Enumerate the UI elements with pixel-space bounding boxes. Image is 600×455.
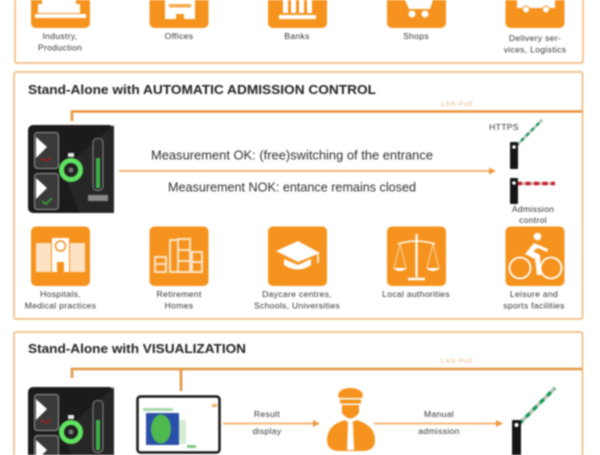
arrow (119, 168, 496, 174)
icon: offices (150, 0, 208, 28)
label: retirement: Retirement (156, 289, 202, 299)
icon: hospitals (31, 226, 90, 286)
panel: automatic admission control (14, 72, 582, 319)
heading: Stand-Alone with VISUALIZATION (28, 342, 246, 356)
label: shops: Shops (403, 31, 429, 41)
panel: top use cases (15, 0, 583, 63)
LAN label: LAN PoE (441, 101, 474, 108)
tablet (138, 396, 220, 452)
label: HTTPS: HTTPS (489, 122, 519, 132)
label: delivery: Delivery ser- (509, 33, 561, 43)
icon: retirement homes (150, 226, 208, 286)
label: offices: Offices (165, 31, 193, 41)
device: access terminal (28, 125, 114, 213)
arrow: result display (223, 420, 320, 427)
message: OK: Measurement OK: (free)switching of the entrance (151, 148, 433, 162)
label: delivery: vices, Logistics (504, 44, 566, 54)
label: education: Schools, Universities (254, 300, 340, 310)
label: result display: Result (254, 409, 280, 419)
panel: visualization (14, 332, 582, 455)
barrier open (510, 120, 542, 169)
arrow: manual admission (374, 420, 503, 427)
icon: industry (31, 0, 90, 28)
heading: Stand-Alone with AUTOMATIC ADMISSION CONTROL (28, 83, 376, 97)
label: manual admission: Manual (424, 409, 454, 419)
label: banks: Banks (284, 31, 310, 41)
label: industry: Production (38, 42, 82, 52)
LAN line (72, 112, 582, 121)
icon: guard (327, 388, 375, 451)
label: industry: Industry, (42, 31, 78, 41)
LAN label: LAN PoE (441, 358, 474, 365)
label: admission control: Admission (512, 204, 554, 214)
LAN line (72, 369, 582, 391)
label: admission control: control (519, 215, 547, 225)
device: access terminal (28, 387, 114, 455)
barrier closed (510, 178, 555, 204)
label: manual admission: admission (418, 426, 460, 436)
icon: banks (268, 0, 327, 28)
icon: shops (387, 0, 446, 28)
barrier open (512, 388, 555, 455)
label: retirement: Homes (165, 300, 193, 310)
icon: local authorities (387, 226, 446, 286)
icon: leisure (506, 226, 564, 286)
label: leisure: sports facilities (503, 300, 565, 310)
label: hospitals: Medical practices (25, 300, 96, 310)
label: local authorities: Local authorities (382, 289, 450, 299)
message: NOK: Measurement NOK: entance remains closed (168, 180, 416, 194)
label: hospitals: Hospitals, (40, 289, 81, 299)
label: result display: display (253, 426, 282, 436)
label: education: Daycare centres, (262, 289, 332, 299)
label: leisure: Leisure and (510, 289, 558, 299)
icon: education (268, 226, 327, 286)
icon: delivery (506, 0, 564, 28)
